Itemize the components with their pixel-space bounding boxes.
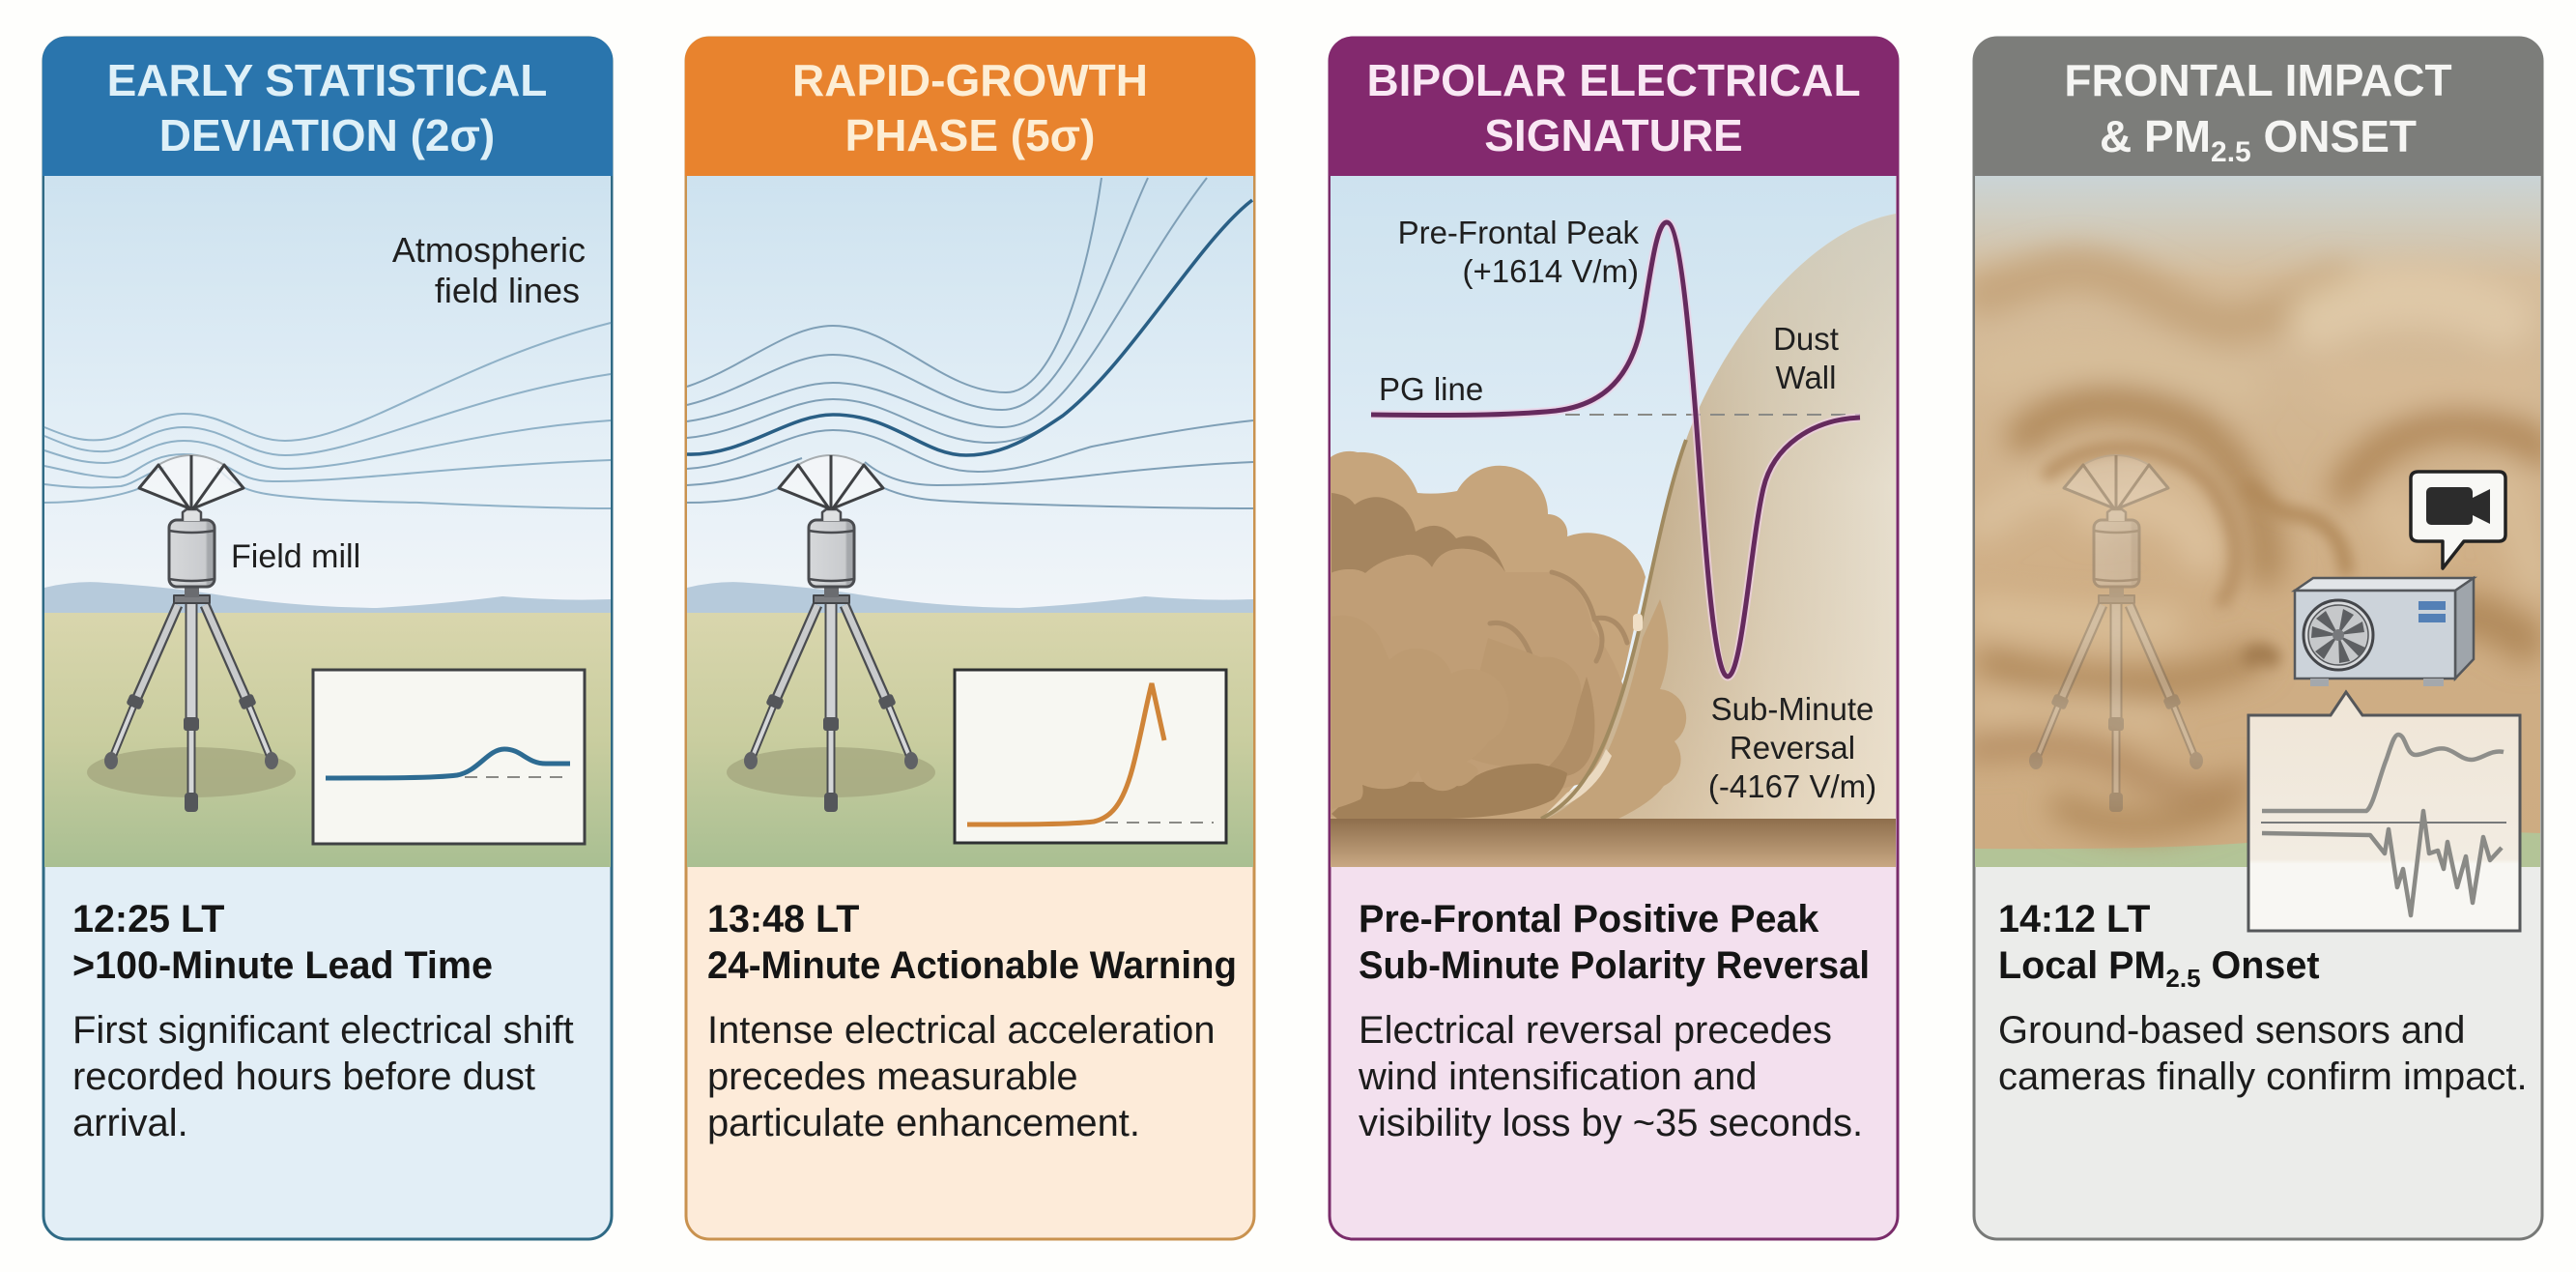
- icon: tripod shadow: [727, 747, 935, 797]
- scene: field mill in calm sky: [44, 176, 611, 867]
- inset chart: PM2.5 and electric field traces: [2248, 692, 2520, 931]
- dust wall: [1541, 214, 1896, 819]
- text block: 2.5: [2165, 964, 2201, 993]
- header band: & PM: [2100, 111, 2211, 161]
- text block: Onset: [2201, 944, 2319, 987]
- header band: [43, 37, 613, 176]
- text block: 13:48 LT: [707, 898, 859, 940]
- icon: camera callout: [2411, 472, 2505, 568]
- label: atmospheric field lines: Atmospheric: [392, 230, 586, 270]
- label: sub-minute reversal: Reversal: [1730, 730, 1855, 766]
- dust swirls: [1975, 270, 2540, 824]
- highlighted field line: [687, 200, 1252, 455]
- label: sub-minute reversal: (-4167 V/m): [1708, 768, 1876, 804]
- label: dust wall: Dust: [1773, 321, 1839, 357]
- label: PG line: PG line: [1379, 371, 1483, 407]
- text block: precedes measurable: [707, 1055, 1078, 1098]
- text block: >100-Minute Lead Time: [72, 944, 493, 987]
- label: pre-frontal peak: Pre-Frontal Peak: [1398, 215, 1639, 250]
- icon: outdoor sensor unit: [2295, 578, 2474, 686]
- panel: bipolar electrical signature: [1329, 37, 1899, 1239]
- baseline: [1565, 414, 1860, 416]
- text block: 12:25 LT: [72, 898, 224, 940]
- text block: [72, 898, 574, 1144]
- header band: [1329, 37, 1899, 176]
- header band: BIPOLAR ELECTRICAL: [1366, 55, 1861, 105]
- header band: FRONTAL IMPACT: [2064, 55, 2452, 105]
- ground strip: [1331, 819, 1896, 867]
- header band: PHASE (5σ): [845, 110, 1095, 160]
- text block: [1998, 898, 2528, 1098]
- label: atmospheric field lines: field lines: [435, 271, 580, 310]
- header band: DEVIATION (2σ): [159, 110, 495, 160]
- header band: RAPID-GROWTH: [792, 55, 1148, 105]
- label: pre-frontal peak: [1398, 215, 1639, 289]
- text block: arrival.: [72, 1102, 188, 1144]
- icon: field mill on tripod: [104, 455, 278, 812]
- inset chart: small deviation: [313, 670, 585, 844]
- chart: PG line: [1371, 222, 1860, 677]
- field lines: [687, 178, 1253, 508]
- panel body: [1974, 38, 2542, 1239]
- panel body: [43, 38, 612, 1239]
- text block: recorded hours before dust: [72, 1055, 535, 1098]
- text block: [1358, 898, 1870, 1144]
- header band: EARLY STATISTICAL: [107, 55, 547, 105]
- text block: wind intensification and: [1358, 1055, 1757, 1098]
- panel body: [1330, 38, 1898, 1239]
- text block: Local PM: [1998, 944, 2165, 987]
- text block: 24-Minute Actionable Warning: [707, 944, 1237, 987]
- header band: 2.5: [2211, 136, 2251, 168]
- label: sub-minute reversal: [1708, 691, 1876, 804]
- text block: cameras finally confirm impact.: [1998, 1055, 2528, 1098]
- scene: dust engulfing the station: [1975, 176, 2540, 867]
- text block: Sub-Minute Polarity Reversal: [1359, 944, 1870, 987]
- panel: frontal impact and PM2.5 onset: [1973, 37, 2543, 1239]
- panel: rapid-growth phase: [685, 37, 1255, 1239]
- text block: visibility loss by ~35 seconds.: [1359, 1102, 1863, 1144]
- panel: early statistical deviation: [43, 37, 613, 1239]
- icon: tripod shadow: [87, 747, 296, 797]
- field lines: [44, 323, 611, 508]
- scene: dust wall and potential gradient: [1331, 176, 1896, 867]
- text block: Ground-based sensors and: [1998, 1009, 2465, 1052]
- inset chart: rapid growth: [955, 670, 1226, 843]
- text block: Intense electrical acceleration: [707, 1009, 1216, 1052]
- text block: Pre-Frontal Positive Peak: [1359, 898, 1818, 940]
- panel body: [686, 38, 1254, 1239]
- icon: field mill on tripod: [744, 455, 918, 812]
- text block: [707, 898, 1237, 1144]
- text block: First significant electrical shift: [72, 1009, 574, 1052]
- header band: ONSET: [2251, 111, 2417, 161]
- label: dust wall: [1776, 328, 1839, 389]
- icon: obscured field mill: [2029, 455, 2203, 812]
- text block: particulate enhancement.: [707, 1102, 1140, 1144]
- label: pre-frontal peak: (+1614 V/m): [1463, 253, 1639, 289]
- header band: [1973, 37, 2543, 176]
- text block: Electrical reversal precedes: [1359, 1009, 1832, 1052]
- scene: field mill with accelerating field: [687, 176, 1253, 867]
- billowing dust cloud: [1331, 440, 1686, 825]
- label: dust wall: Wall: [1776, 360, 1836, 395]
- header band: [685, 37, 1255, 176]
- label: atmospheric field lines: [392, 230, 586, 310]
- text block: 14:12 LT: [1998, 898, 2150, 940]
- header band: SIGNATURE: [1484, 110, 1743, 160]
- label: field mill: Field mill: [231, 538, 360, 575]
- label: sub-minute reversal: Sub-Minute: [1711, 691, 1874, 727]
